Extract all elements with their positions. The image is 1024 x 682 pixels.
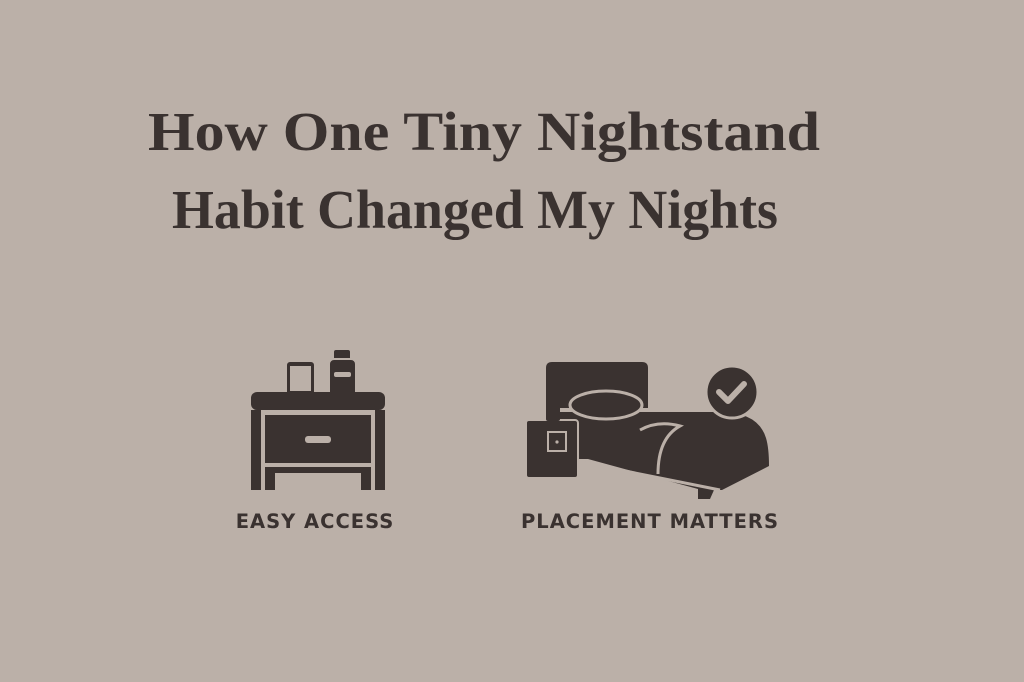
pillow <box>570 391 642 419</box>
bottle <box>329 350 356 398</box>
tablet <box>286 361 315 399</box>
title <box>148 101 820 240</box>
table top and body <box>251 392 385 490</box>
check circle <box>706 366 758 418</box>
label: easy access: EASY ACCESS <box>236 510 394 533</box>
bed body <box>558 412 769 499</box>
title line 1: How One Tiny Nightstand <box>148 101 820 162</box>
headboard <box>546 362 648 408</box>
title line 2: Habit Changed My Nights <box>172 179 778 240</box>
label: placement matters: PLACEMENT MATTERS <box>521 510 779 533</box>
sheet fold lines <box>640 424 680 474</box>
small nightstand <box>526 397 578 478</box>
